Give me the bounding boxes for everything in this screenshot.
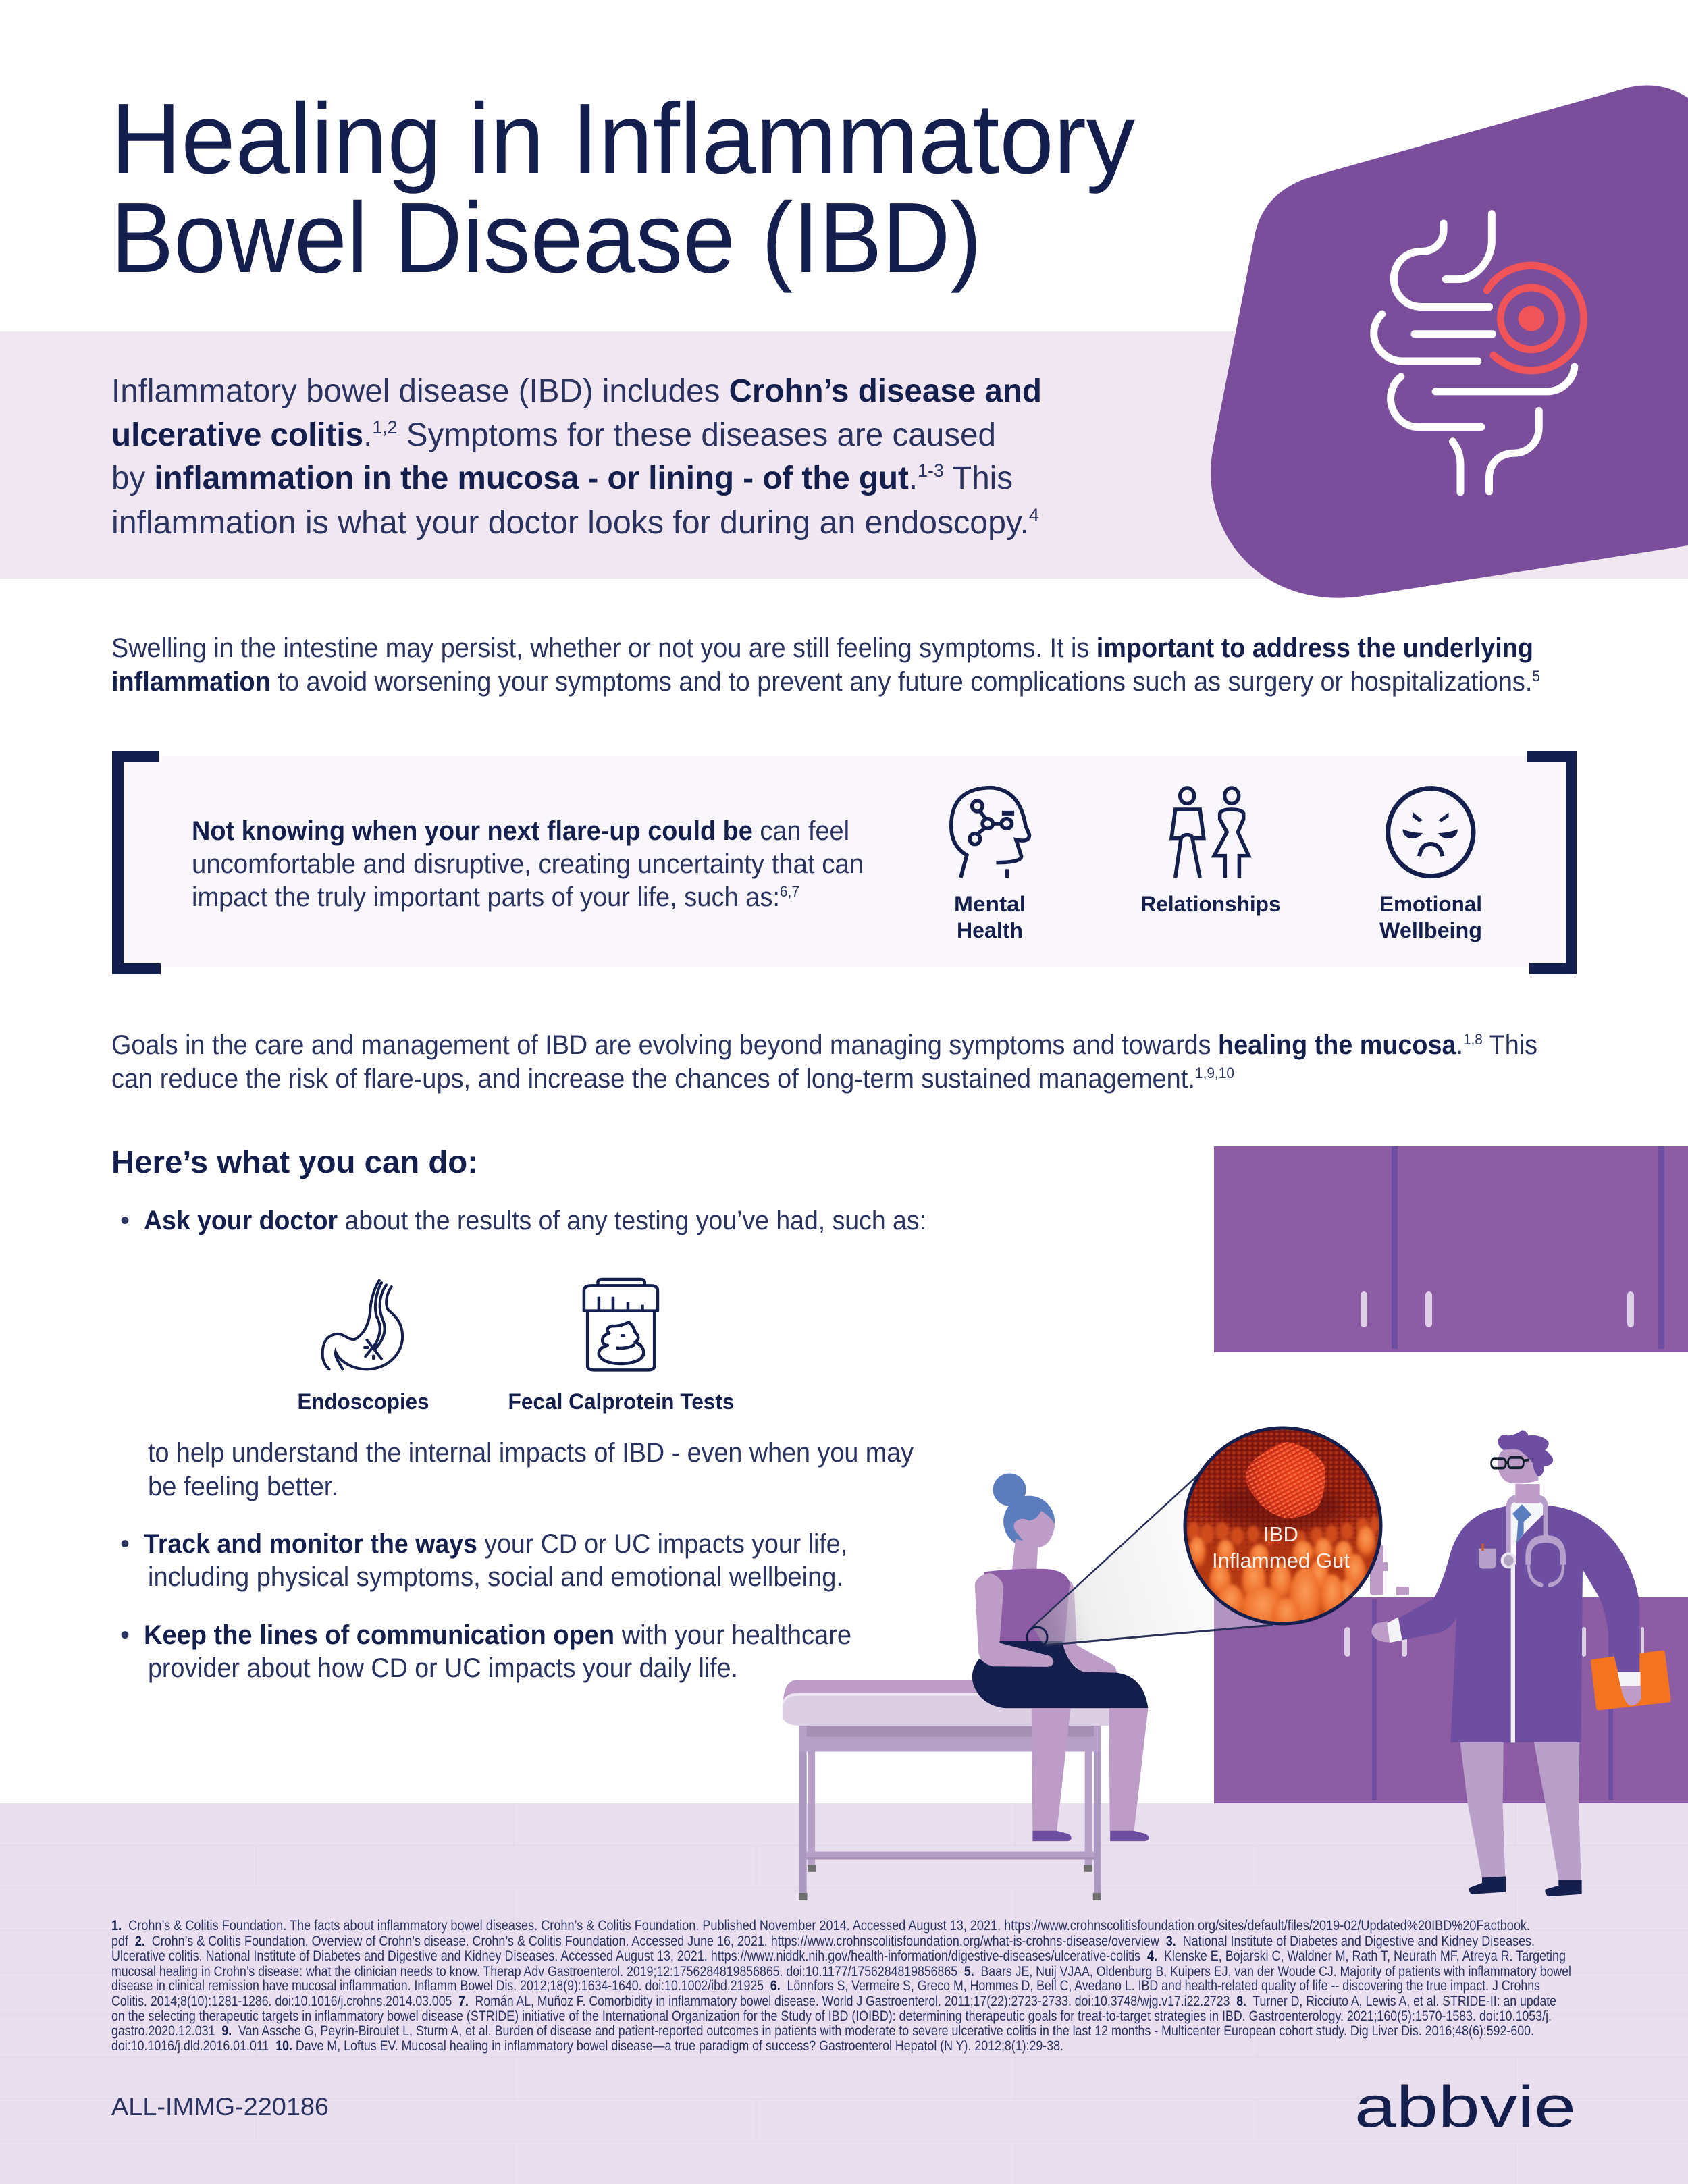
label: IBD Inflammed Gut: IBD: [1263, 1522, 1298, 1546]
text: internal impacts: [148, 1438, 914, 1501]
label: Mental Health: Health: [957, 918, 1023, 942]
right hand and cuff: [1620, 1686, 1641, 1705]
references: Ulcerative colitis. National Institute of Diabetes and Digestive and Kidney Diseases. Accessed August 13, 2021. https://www.niddk.nih.gov/health-information/digestive-diseases/ulcerative-colitis 4. Klenske E, Bojarski C, Waldner M, Rath T, Neurath MF, Atreya R. Targeting: [111, 1948, 1566, 1964]
label: Emotional Wellbeing: [1379, 892, 1482, 942]
patient figure: [972, 1473, 1149, 1841]
stethoscope: [1508, 1499, 1563, 1585]
bullet: keep communication open: [120, 1620, 851, 1683]
intro paragraph: by inflammation in the mucosa - or lining - of the gut.: [111, 460, 918, 496]
legs: [1032, 1708, 1148, 1832]
neck and face: [1498, 1448, 1540, 1507]
bullet: track and monitor: •: [120, 1529, 130, 1559]
icon: fecal calprotein sample jar: [584, 1279, 658, 1370]
skirt: [972, 1641, 1148, 1708]
swelling paragraph: [111, 633, 1540, 697]
lab coat: [1399, 1506, 1639, 1742]
bullet: ask your doctor: Ask your doctor about the results of any testing you’ve had, such as:: [144, 1206, 926, 1235]
references: [111, 1918, 1571, 2054]
intro paragraph: 1,2: [372, 417, 398, 437]
label: Endoscopies: Endoscopies: [297, 1389, 429, 1414]
circular view: IBD inflamed gut: [1184, 1427, 1381, 1638]
logo: abbvie: abbvie: [1354, 2075, 1576, 2139]
right bracket: [1527, 751, 1577, 974]
references: doi:10.1016/j.dld.2016.01.011 10. Dave M, Loftus EV. Mucosal healing in inflammatory bowel disease—a true paradigm of success? Gastroenterol Hepatol (N Y). 2012;8(1):29-38.: [111, 2038, 1063, 2054]
bullet: track and monitor: Track and monitor the ways your CD or UC impacts your life,: [144, 1529, 847, 1559]
document code: ALL-IMMG-220186: [111, 2093, 329, 2121]
goals paragraph: This: [1483, 1030, 1537, 1060]
uncertainty text: uncomfortable and disruptive, creating uncertainty that can: [192, 849, 864, 879]
bullet: track and monitor: including physical symptoms, social and emotional wellbeing.: [148, 1562, 843, 1592]
references: Colitis. 2014;8(10):1281-1286. doi:10.1016/j.crohns.2014.03.005 7. Román AL, Muñoz F. Comorbidity in inflammatory bowel disease. World J Gastroenterol. 2011;17(22):2723-2733. doi:10.3748/wjg.v17.i22.2723 8. Turner D, Ricciuto A, Lewis A, et al. STRIDE-II: an update: [111, 1994, 1556, 2009]
title: Bowel Disease (IBD): [111, 182, 982, 294]
shoes: [1469, 1876, 1582, 1896]
purple hero shape with gut icon: [1211, 86, 1688, 598]
pink intro band background: [0, 331, 1688, 579]
swelling paragraph: Swelling in the intestine may persist, whether or not you are still feeling symptoms. It is important to address the underlying: [111, 633, 1533, 663]
magnifier cone to gut view: [1027, 1468, 1273, 1647]
hair: [993, 1473, 1055, 1547]
intro paragraph: inflammation is what your doctor looks for during an endoscopy.: [111, 505, 1024, 541]
clipboard: [1591, 1651, 1671, 1711]
bullet: track and monitor: [120, 1529, 847, 1592]
intro paragraph: 1-3: [918, 460, 944, 481]
intro paragraph: 4: [1029, 505, 1039, 525]
uncertainty text: Not knowing when your next flare-up could be can feel: [192, 816, 849, 846]
references: mucosal healing in Crohn’s disease: what the clinician needs to know. Therap Adv Gastroenterol. 2019;12:1756284819856865. doi:10.1177/1756284819856865 5. Baars JE, Nuij VJAA, Oldenburg B, Kuipers EJ, van der Woude CJ. Majority of patients with inflammatory bowel: [111, 1964, 1571, 1979]
label: Relationships: Relationships: [1141, 892, 1280, 916]
goals paragraph: 1,9,10: [1195, 1065, 1234, 1082]
icon: emotional wellbeing: [1388, 789, 1473, 876]
lower base cabinets and counter items: [1214, 1545, 1688, 1803]
exam bench: [783, 1680, 1109, 1900]
goals paragraph: 1,8: [1463, 1031, 1483, 1048]
left hand and cuff: [1371, 1621, 1390, 1643]
front arm: [975, 1573, 1053, 1667]
goals paragraph: Goals in the care and management of IBD are evolving beyond managing symptoms and towards healing the mucosa.: [111, 1030, 1470, 1060]
label: IBD Inflammed Gut: [1212, 1522, 1350, 1572]
neck and face: [1012, 1511, 1055, 1571]
icon: inflamed intestine: [1374, 214, 1584, 492]
intro paragraph: Symptoms for these diseases are caused: [398, 417, 996, 453]
icon: mental health: [951, 788, 1030, 878]
bullet: ask your doctor: •: [120, 1206, 130, 1235]
panel: impact on life: [112, 751, 1577, 974]
label: IBD Inflammed Gut: Inflammed Gut: [1212, 1549, 1350, 1572]
title: [111, 83, 1135, 294]
upper wall cabinets: [1214, 1146, 1688, 1352]
glasses: [1492, 1458, 1529, 1468]
coat pocket: [1479, 1549, 1496, 1568]
uncertainty text: [192, 816, 864, 912]
intro paragraph: ulcerative colitis.: [111, 417, 372, 453]
icon: relationships: [1171, 788, 1248, 878]
intro paragraph: This: [944, 460, 1013, 496]
torso top: [984, 1569, 1070, 1643]
uncertainty text: 6,7: [780, 883, 799, 900]
floor with tile lines: [0, 1803, 1688, 2184]
bullet: keep communication open: Keep the lines of communication open with your healthcare: [144, 1620, 851, 1650]
title: Healing in Inflammatory: [111, 83, 1135, 194]
heading: here's what you can do: Here’s what you can do:: [111, 1144, 478, 1179]
swelling paragraph: inflammation to avoid worsening your symptoms and to prevent any future complications such as surgery or hospitalizations.: [111, 667, 1602, 697]
text: internal impacts: be feeling better.: [148, 1472, 338, 1501]
label: Emotional Wellbeing: Emotional: [1379, 892, 1482, 916]
doctor figure: [1371, 1430, 1671, 1896]
swelling paragraph: 5: [1532, 668, 1540, 685]
bullet: keep communication open: provider about how CD or UC impacts your daily life.: [148, 1653, 738, 1683]
label: Emotional Wellbeing: Wellbeing: [1379, 918, 1482, 942]
goals paragraph: [111, 1030, 1537, 1094]
uncertainty text: impact the truly important parts of your life, such as:: [192, 882, 810, 912]
left bracket: [112, 751, 161, 974]
references: pdf 2. Crohn’s & Colitis Foundation. Overview of Crohn’s disease. Crohn’s & Colitis Foundation. Accessed June 16, 2021. https://www.crohnscolitisfoundation.org/what-is-crohns-disease/overview 3. National Institute of Diabetes and Digestive and Kidney Diseases.: [111, 1934, 1535, 1949]
shirt and tie: [1510, 1503, 1543, 1545]
intro paragraph: Inflammatory bowel disease (IBD) includes Crohn’s disease and: [111, 373, 1042, 409]
references: disease in clinical remission have mucosal inflammation. Inflamm Bowel Dis. 2012;18(9):1634-1640. doi:10.1002/ibd.21925 6. Lönnfors S, Vermeire S, Greco M, Hommes D, Bell C, Avedano L. IBD and health-related quality of life -- discovering the true impact. J Crohns: [111, 1978, 1540, 1994]
icon: endoscopies stomach: [323, 1281, 402, 1369]
intro paragraph: [111, 373, 1042, 541]
label: Mental Health: Mental: [954, 892, 1026, 916]
bullet: keep communication open: •: [120, 1620, 130, 1650]
shoes: [1032, 1831, 1149, 1841]
label: Fecal Calprotein Tests: Fecal Calprotein Tests: [508, 1389, 735, 1414]
goals paragraph: can reduce the risk of flare-ups, and increase the chances of long-term sustained management.: [111, 1064, 1252, 1094]
back arm: [1062, 1581, 1117, 1674]
label: Mental Health: [954, 892, 1026, 942]
text: internal impacts: to help understand the internal impacts of IBD - even when you may: [148, 1438, 914, 1468]
trousers: [1460, 1742, 1581, 1880]
hair: [1498, 1430, 1553, 1476]
